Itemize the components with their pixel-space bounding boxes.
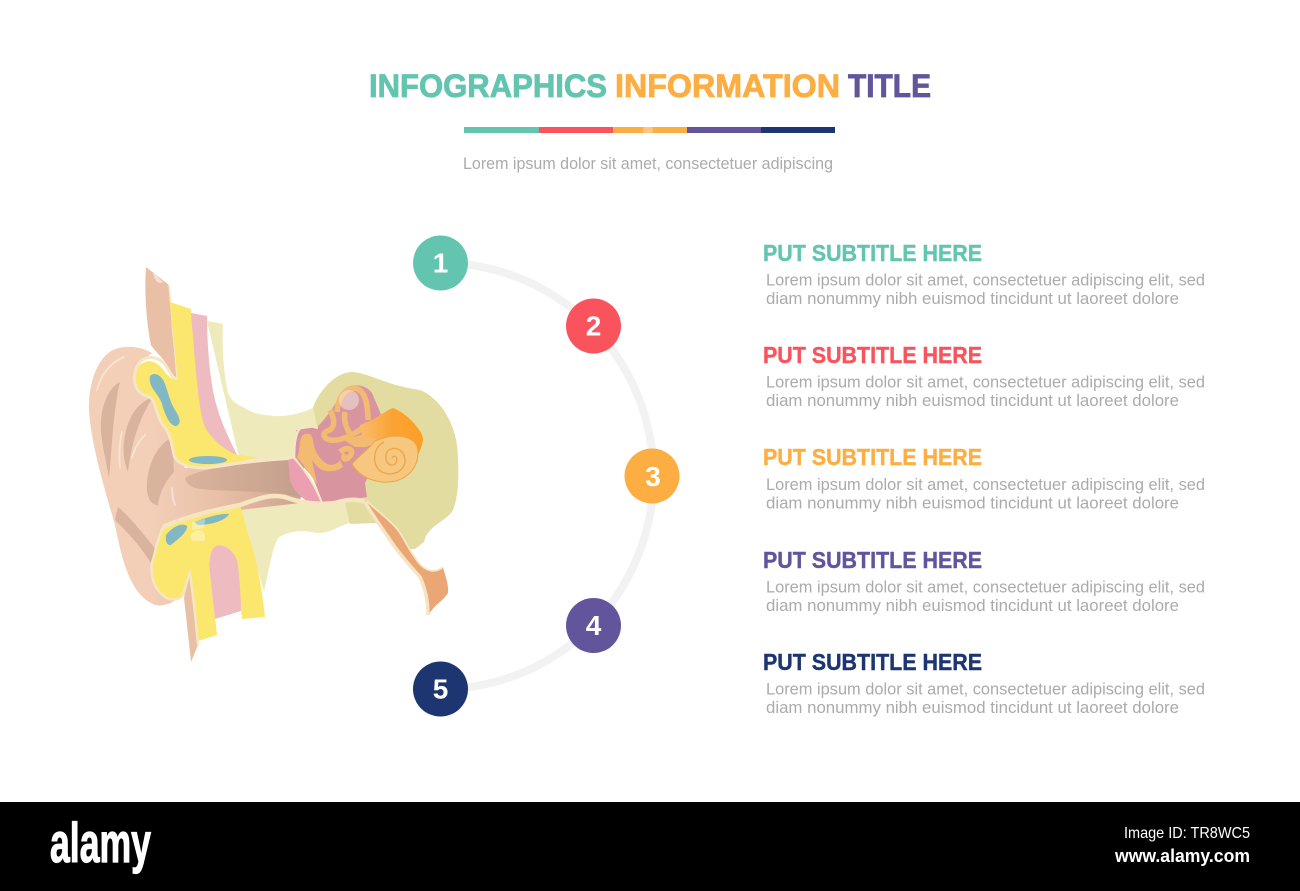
item 4 text: PUT SUBTITLE HERE [763, 547, 982, 573]
item 5 text: Lorem ipsum dolor sit amet, consectetuer adipiscing elit, sed [766, 680, 1205, 698]
item 1 text: Lorem ipsum dolor sit amet, consectetuer adipiscing elit, sed [766, 270, 1205, 290]
step 5 marker: 5 [433, 674, 448, 704]
item 3 text [763, 444, 1205, 512]
ring arc [440, 263, 654, 689]
middle ear cavity [295, 385, 384, 503]
olive tissue behind inner ear [313, 372, 458, 550]
upper yellow cartilage [135, 302, 262, 467]
eustachian lining, upper edge [367, 501, 443, 571]
step 1 marker: 1 [433, 248, 448, 278]
upper cartilage flap [145, 267, 177, 377]
ear highlights [97, 357, 175, 505]
lower cartilage spike [184, 573, 198, 662]
cochlea spiral [375, 442, 405, 474]
item 1 text: PUT SUBTITLE HERE [763, 240, 982, 266]
item 1 text [763, 240, 1205, 308]
step 2 marker [566, 298, 621, 354]
canal shading [185, 460, 305, 498]
lower blue cavities [166, 514, 229, 545]
eardrum lining [294, 458, 322, 503]
alamy logo: alamy [50, 811, 151, 874]
cochlea base [360, 408, 423, 467]
flap lining [169, 285, 177, 377]
middle ear lining [294, 425, 318, 458]
title: INFOGRAPHICS [369, 68, 607, 104]
item 4 text: diam nonummy nibh euismod tincidunt ut laoreet dolore [766, 596, 1179, 615]
outer ear skin and canal [89, 347, 305, 605]
website: www.alamy.com [1114, 846, 1250, 866]
watermark patch [191, 519, 205, 541]
flap highlight [153, 272, 163, 283]
item 2 text: PUT SUBTITLE HERE [763, 342, 982, 368]
ear folds [101, 382, 174, 565]
lower cartilage lining [152, 527, 198, 645]
item 4 text [763, 547, 1205, 615]
item 5 text: diam nonummy nibh euismod tincidunt ut laoreet dolore [766, 698, 1179, 717]
item 5 text [763, 649, 1205, 717]
eardrum [288, 458, 323, 503]
step 3 marker: 3 [645, 461, 661, 492]
title: TITLE [848, 68, 931, 104]
eustachian lining, lower edge [365, 502, 428, 615]
image id: Image ID: TR8WC5 [1124, 825, 1250, 842]
pink tissue, upper [191, 313, 237, 455]
pale yellow tissue, lower [240, 502, 352, 592]
step 3 marker [624, 448, 680, 504]
upper blue cavities [150, 374, 227, 464]
lower pink tissue [209, 545, 241, 619]
title: INFORMATION [615, 68, 840, 104]
item 3 text: Lorem ipsum dolor sit amet, consectetuer adipiscing elit, sed [766, 475, 1205, 494]
step 2 marker: 2 [586, 310, 601, 342]
item 2 text: diam nonummy nibh euismod tincidunt ut laoreet dolore [766, 391, 1179, 410]
subtitle text: Lorem ipsum dolor sit amet, consectetuer adipiscing [463, 154, 833, 173]
item 2 text: Lorem ipsum dolor sit amet, consectetuer adipiscing elit, sed [766, 372, 1205, 392]
step 5 marker [413, 662, 468, 716]
item 3 text: diam nonummy nibh euismod tincidunt ut laoreet dolore [766, 494, 1179, 512]
ossicles [297, 434, 343, 484]
item 1 text: diam nonummy nibh euismod tincidunt ut laoreet dolore [766, 289, 1179, 308]
vestibular highlight [339, 390, 359, 410]
pale yellow tissue, upper [207, 321, 330, 470]
item 5 text: PUT SUBTITLE HERE [763, 649, 982, 675]
canal lower lining [163, 496, 365, 527]
illustration: ear anatomy [89, 267, 458, 662]
step 4 marker: 4 [586, 610, 602, 641]
upper cartilage lining [134, 357, 262, 468]
step 1 marker [413, 236, 468, 290]
item 4 text: Lorem ipsum dolor sit amet, consectetuer adipiscing elit, sed [766, 578, 1205, 596]
canal upper lining [205, 457, 294, 468]
vestibule [344, 425, 395, 447]
cochlea body [352, 436, 418, 482]
item 2 text [763, 342, 1205, 410]
step 4 marker [566, 598, 621, 653]
item 3 text: PUT SUBTITLE HERE [763, 444, 982, 470]
title [369, 68, 931, 104]
title divider bar [464, 125, 835, 135]
eustachian tube [365, 500, 448, 615]
lower yellow cartilage [151, 505, 265, 641]
footer band [0, 802, 1300, 891]
semicircular canals [324, 388, 368, 459]
